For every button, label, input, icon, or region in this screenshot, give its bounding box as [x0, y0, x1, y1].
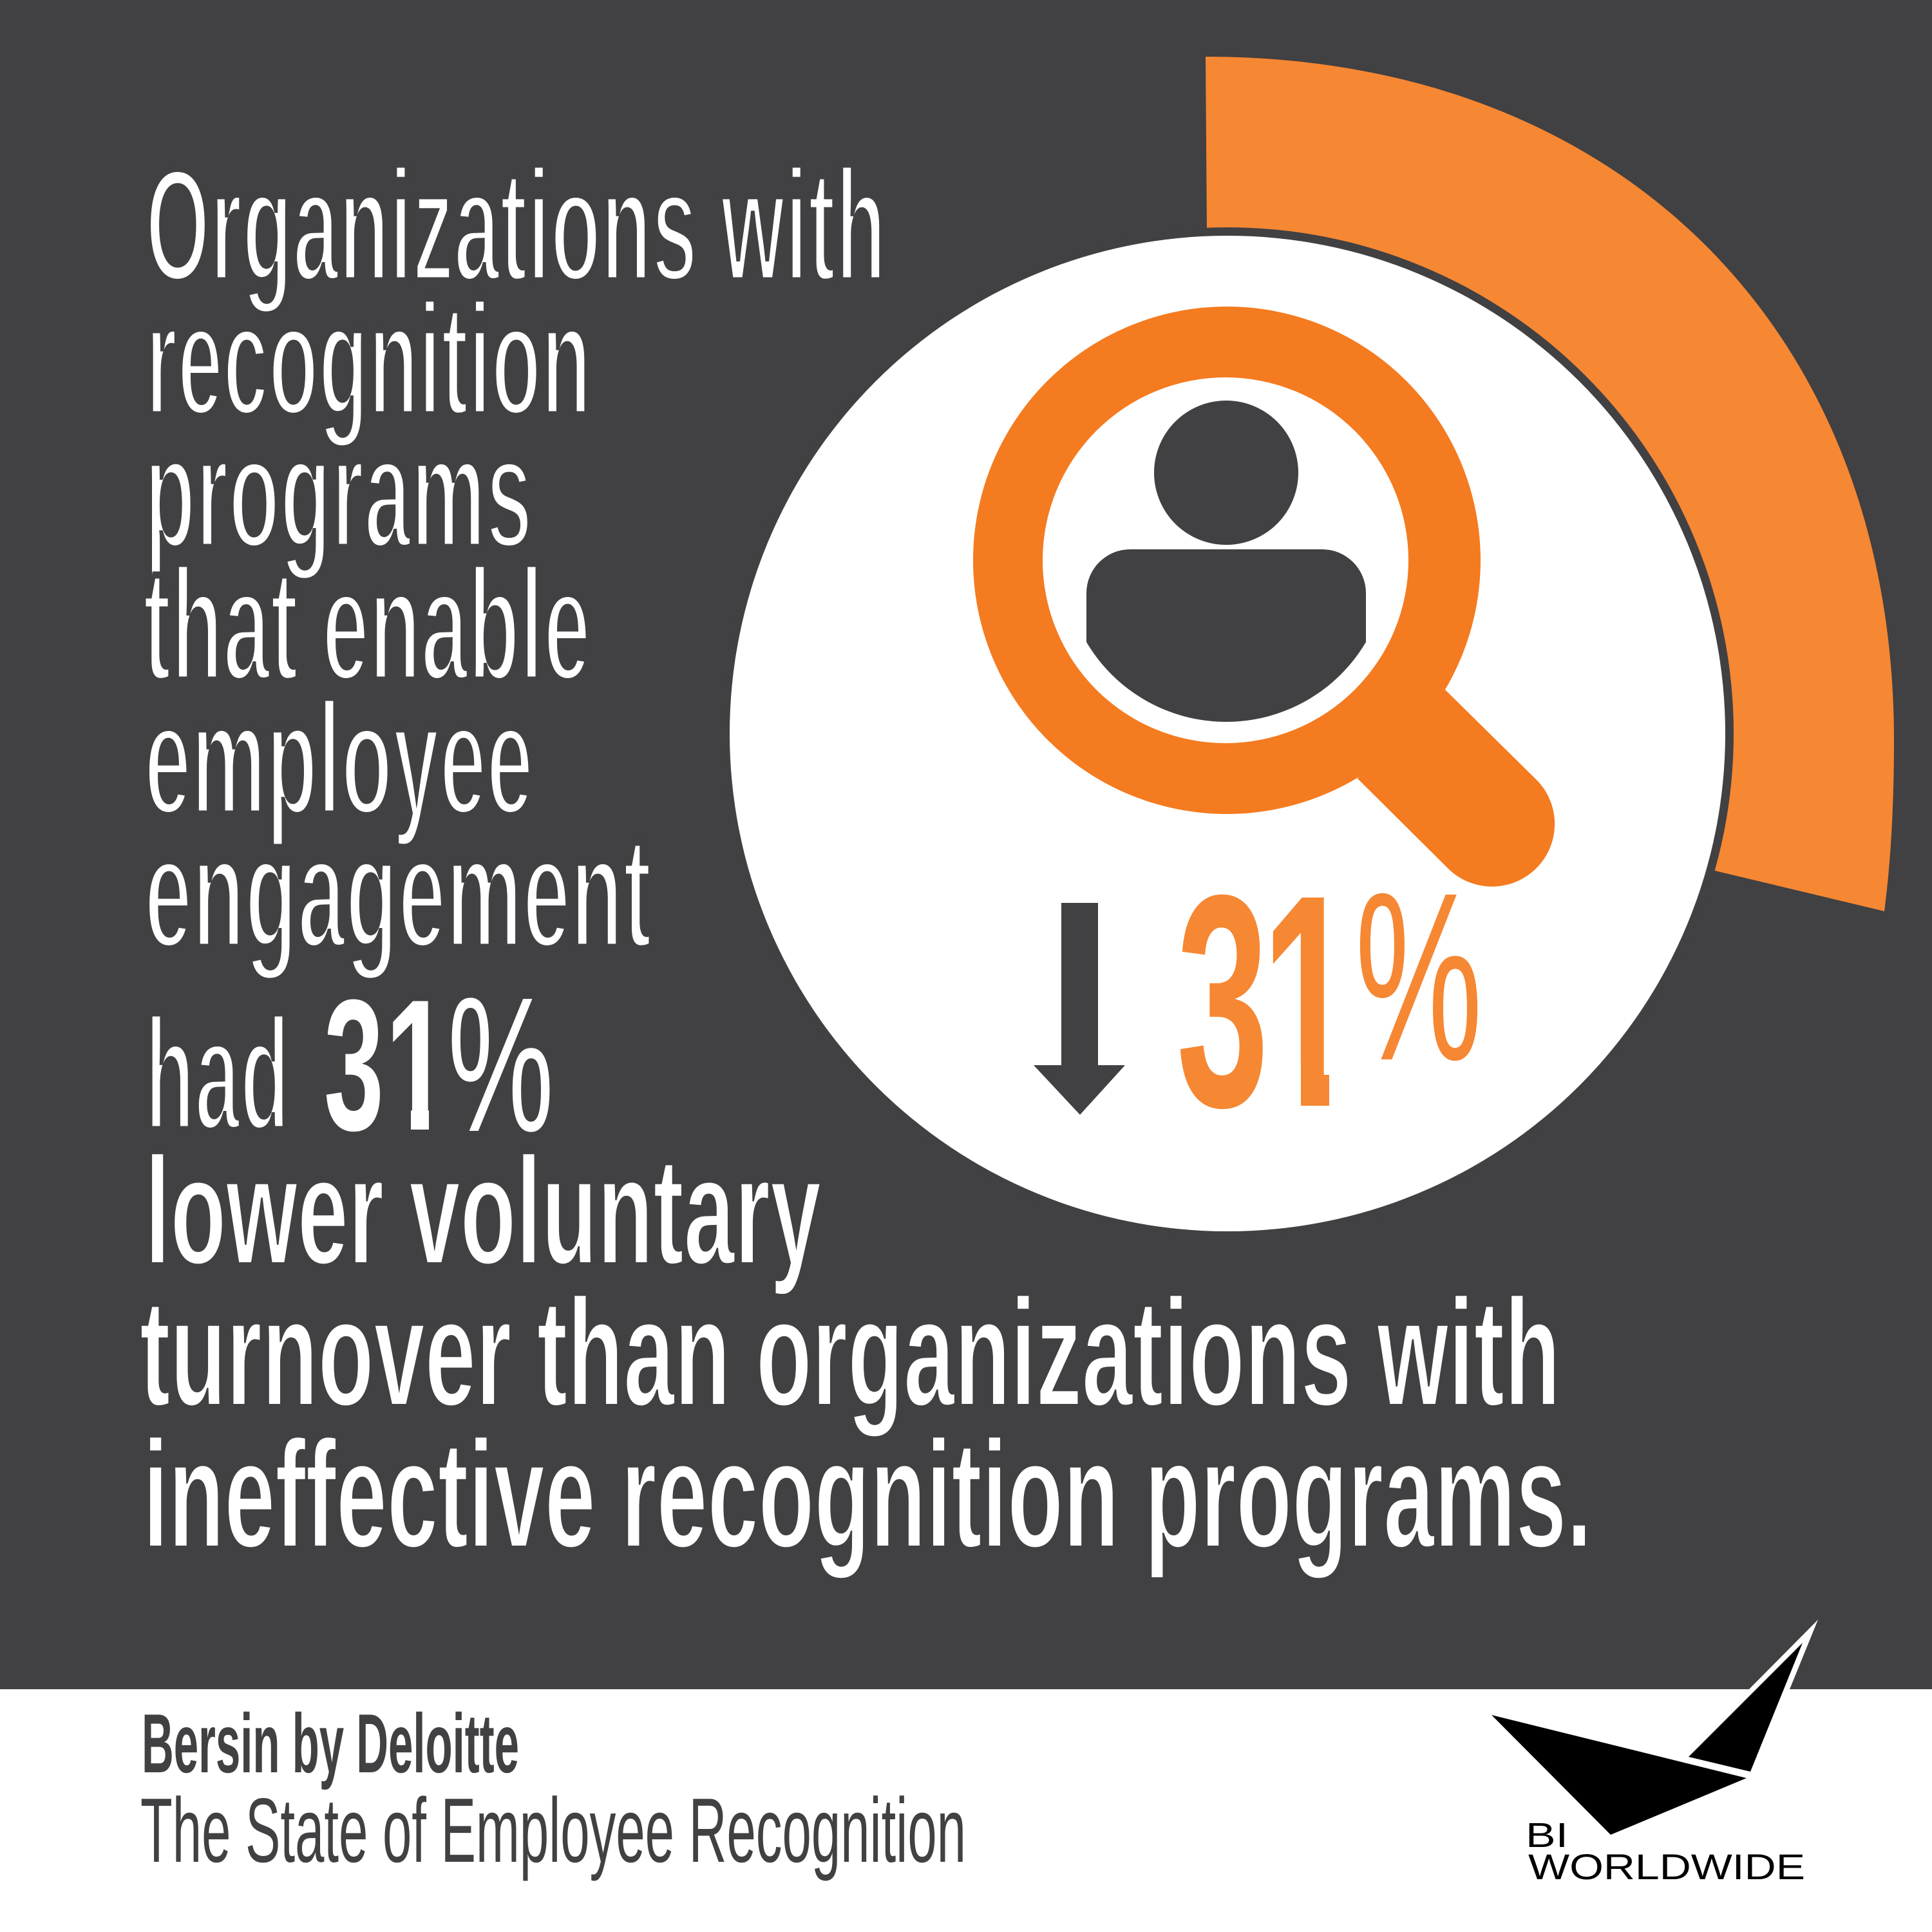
digit 3: 3 — [1177, 832, 1269, 1170]
line: programs: programs — [144, 402, 533, 582]
logo text BI: BI — [1526, 1816, 1568, 1855]
line: lower voluntary: lower voluntary — [145, 1126, 821, 1296]
logo lower wing — [1492, 1715, 1747, 1835]
person head — [1154, 401, 1298, 545]
magnifier handle — [1358, 690, 1555, 887]
digit 1 bold: 1 — [385, 961, 450, 1170]
line: that enable: that enable — [143, 535, 591, 714]
orange arc gauge — [1206, 57, 1894, 911]
person body — [1086, 549, 1366, 722]
line: recognition: recognition — [146, 269, 591, 449]
line: had: had — [145, 984, 290, 1164]
digit 3 bold: 3 — [324, 961, 384, 1170]
mask foot of small digit 1 left — [384, 1103, 411, 1133]
digit 1: 1 — [1262, 832, 1355, 1170]
percent sign: % — [448, 958, 554, 1172]
source: The State of Employee Recognition: The State of Employee Recognition — [140, 1779, 966, 1882]
logo text WORLDWIDE: WORLDWIDE — [1528, 1846, 1805, 1887]
source: Bersin by Deloitte: Bersin by Deloitte — [142, 1696, 519, 1790]
headline text block — [140, 135, 1592, 1580]
magnifier ring — [973, 307, 1481, 814]
icon: down arrow — [1034, 903, 1125, 1115]
percent sign: % — [1355, 842, 1482, 1110]
line: Organizations with: Organizations with — [146, 135, 886, 315]
white circle — [730, 236, 1725, 1231]
line: employee: employee — [144, 668, 533, 848]
mask foot of small digit 1 right — [429, 1103, 450, 1133]
footer panel — [0, 1689, 1932, 1932]
logo white sail outline — [1749, 1620, 1818, 1689]
mask foot of digit 1 left — [1256, 1063, 1301, 1111]
stat: 31% in circle — [1177, 832, 1482, 1170]
dark ring around circle — [721, 227, 1734, 1240]
icon: magnifying glass with person — [973, 307, 1555, 887]
line: engagement: engagement — [144, 802, 652, 981]
logo upper wing — [1689, 1643, 1803, 1772]
logo: BI Worldwide — [1492, 1620, 1818, 1887]
mask foot of digit 1 right — [1329, 1063, 1361, 1111]
